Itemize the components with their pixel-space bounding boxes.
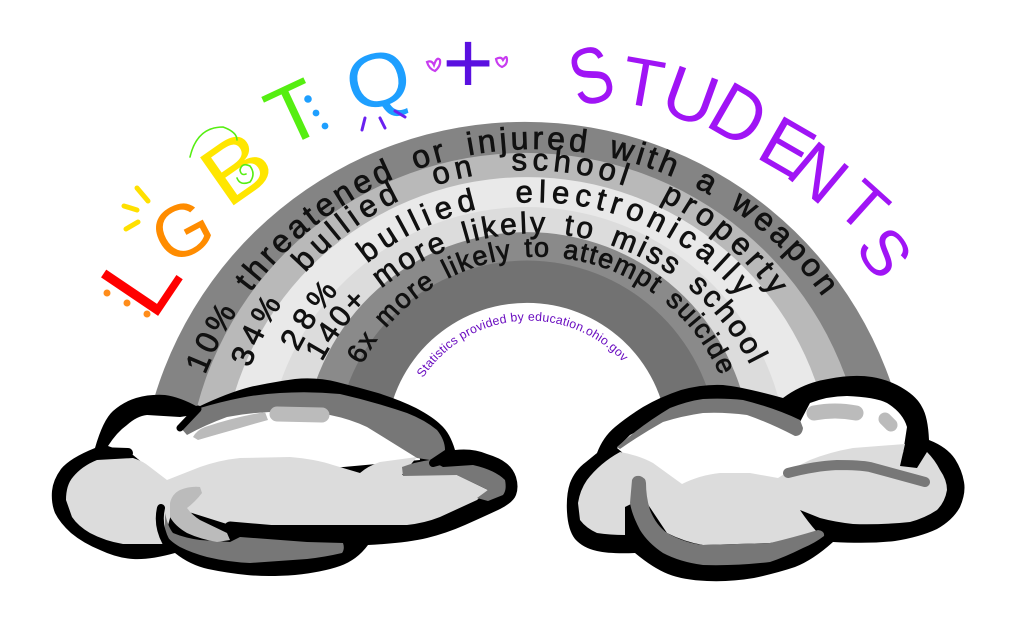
letter B: B <box>183 111 290 225</box>
icon: orange dots by L <box>104 290 150 318</box>
letter G: G <box>137 180 227 281</box>
icon: blue dots by T <box>304 95 328 129</box>
icon: heart left of plus <box>427 59 440 71</box>
icon: yellow rays by G <box>124 188 148 229</box>
left cloud ink lines <box>98 409 455 542</box>
right cloud outline <box>567 376 964 581</box>
right cloud <box>567 376 964 581</box>
statistic: threatened or injured: 10% threatened or injured with a weapon <box>187 126 834 374</box>
right cloud shadows <box>617 399 803 449</box>
statistic: more likely to miss school: 140+ more likely to miss school <box>307 211 770 364</box>
left cloud shadows <box>180 392 445 460</box>
icon: purple rays under Q <box>362 111 405 130</box>
letter U: U <box>652 50 728 143</box>
letter L: L <box>79 226 203 335</box>
letter Q: Q <box>336 30 420 129</box>
right cloud body <box>578 444 947 545</box>
plus sign: + <box>442 13 494 112</box>
letter S: S <box>842 214 927 291</box>
letter D: D <box>695 66 781 164</box>
letter T: T <box>824 166 903 247</box>
right cloud mid tones <box>814 411 856 413</box>
letter T: T <box>616 42 670 124</box>
icon: heart right of plus <box>496 57 507 67</box>
icon: green swirl on B <box>190 127 253 183</box>
left cloud <box>52 378 518 576</box>
title: LGBTQ+ rainbow letters <box>79 13 494 335</box>
letter S: S <box>560 28 623 125</box>
left cloud outline <box>52 378 518 576</box>
source credit: Statistics provided by education.ohio.gov <box>417 312 628 377</box>
letter N: N <box>774 127 863 219</box>
statistic: bullied on school property: 34% bullied on school property <box>232 150 786 366</box>
title: STUDENTS letters <box>560 28 927 291</box>
left cloud mid tones <box>193 412 268 440</box>
statistic: bullied electronically: 28% bullied electronically <box>281 179 753 352</box>
left cloud body <box>66 457 488 544</box>
left cloud highlight <box>108 403 420 483</box>
statistic: more likely to attempt suicide: 6x more likely to attempt suicide <box>348 239 732 374</box>
right cloud highlight <box>617 396 907 493</box>
rainbow arch <box>146 122 904 432</box>
letter T: T <box>253 62 337 165</box>
letter E: E <box>746 101 828 194</box>
